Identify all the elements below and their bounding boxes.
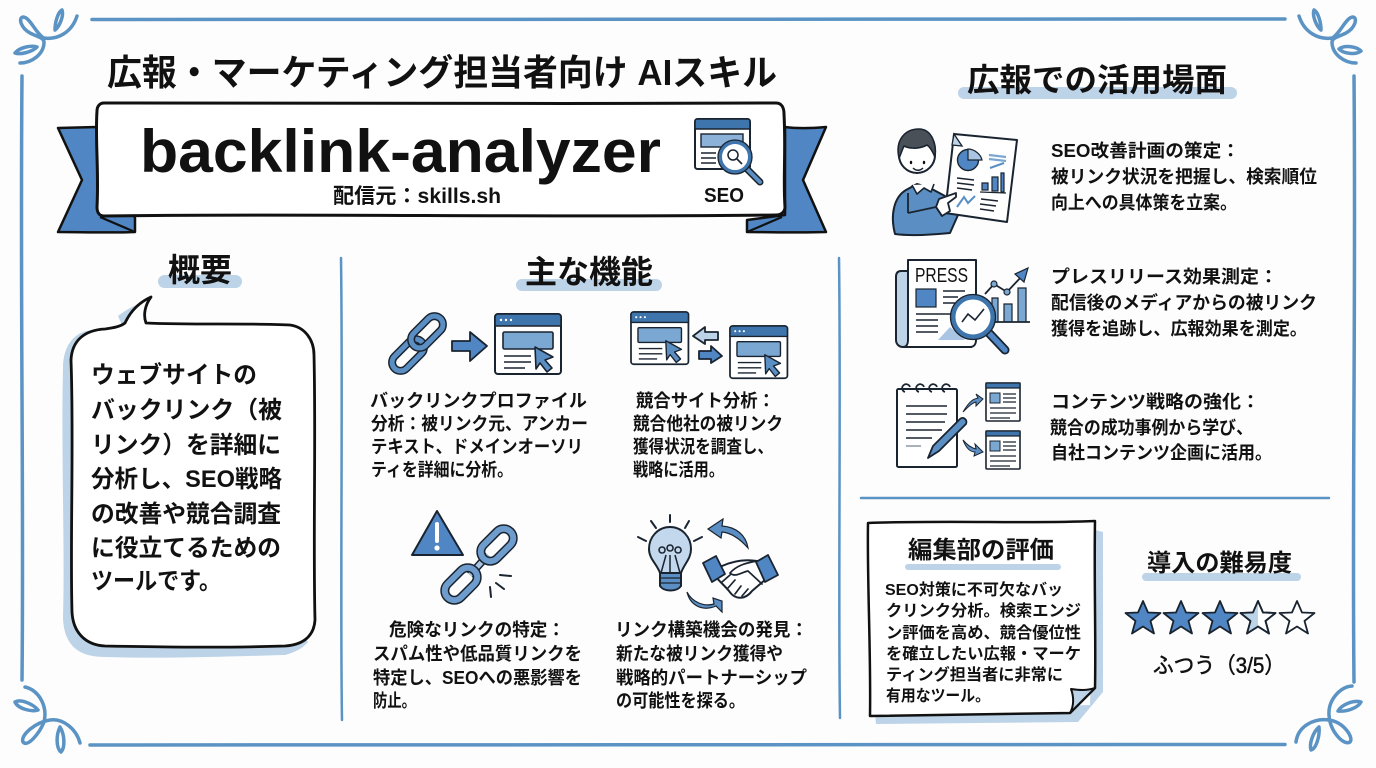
note fold	[1070, 688, 1095, 713]
overview text: の改善や競合調査	[91, 501, 281, 528]
use case text: SEO plan: 被リンク状況を把握し、検索順位	[1051, 167, 1317, 187]
heading: editor review: 編集部の評価	[908, 537, 1054, 564]
SEO label: SEO	[704, 185, 744, 207]
panel: main features	[370, 254, 808, 711]
feature text: competitor analysis: 競合他社の被リンク	[633, 414, 783, 434]
heading: PR use cases: 広報での活用場面	[967, 62, 1227, 98]
icon: person with report	[893, 129, 1017, 235]
speech bubble	[71, 297, 315, 647]
source: 配信元：skills.sh	[333, 185, 501, 208]
use case text: press release: 獲得を追跡し、広報効果を測定。	[1051, 319, 1307, 339]
review text: クリンク分析。検索エンジ	[886, 601, 1081, 620]
difficulty label: ふつう（3/5）	[1153, 653, 1285, 678]
feature text: backlink profile	[370, 391, 588, 480]
icon: competitor browsers	[631, 312, 787, 378]
feature text: risky links: 特定し、SEOへの悪影響を	[373, 667, 582, 688]
review text	[885, 580, 1081, 705]
icon: bulb and handshake	[638, 515, 778, 612]
icon: chain to browser	[389, 313, 561, 374]
review text: ン評価を高め、競合優位性	[886, 623, 1081, 642]
feature text: risky links: 危険なリンクの特定：	[389, 620, 565, 640]
feature text: competitor analysis: 競合サイト分析：	[636, 391, 775, 411]
feature text: link opportunities: 新たな被リンク獲得や	[616, 644, 783, 664]
review text: 有用なツール。	[886, 687, 990, 705]
icon: press release analysis	[896, 260, 1030, 350]
icon: top-right corner flourish	[1299, 10, 1361, 63]
feature text: risky links: スパム性や低品質リンクを	[373, 644, 582, 664]
use case text: SEO plan: 向上への具体策を立案。	[1051, 193, 1237, 213]
banner plate	[96, 102, 785, 216]
star rating	[1126, 601, 1314, 634]
icon: top-left corner flourish	[15, 10, 77, 63]
heading: difficulty: 導入の難易度	[1147, 550, 1292, 577]
icon: SEO browser magnifier	[695, 119, 760, 182]
feature text: competitor analysis: 戦略に活用。	[633, 459, 724, 480]
overview text: ツールです。	[91, 568, 221, 595]
review text: を確立したい広報・マーケ	[886, 644, 1081, 663]
use case text: SEO plan: SEO改善計画の策定：	[1051, 141, 1240, 161]
use case text: content strategy: 競合の成功事例から学び、	[1050, 417, 1253, 438]
section dividers	[341, 258, 1329, 720]
use case text: press release: 配信後のメディアからの被リンク	[1051, 292, 1317, 313]
note sheet	[868, 521, 1095, 716]
panel: editor review note	[868, 521, 1103, 724]
use case text: content strategy	[1050, 391, 1272, 463]
panel: difficulty rating	[1126, 550, 1314, 678]
feature text: risky links: 防止。	[373, 691, 416, 711]
heading: overview: 概要	[168, 252, 232, 288]
feature text: backlink profile: テキスト、ドメインオーソリ	[371, 437, 583, 457]
icon: bottom-right corner flourish	[1296, 686, 1361, 750]
ribbon: left tail	[58, 127, 135, 232]
panel: PR use cases	[893, 62, 1317, 469]
feature text: link opportunities: 戦略的パートナーシップ	[616, 667, 807, 688]
heading: main features: 主な機能	[525, 254, 653, 290]
overview text: リンク）を詳細に	[91, 432, 281, 459]
review text: ティング担当者に非常に	[886, 665, 1063, 684]
icon: warning and broken chain	[412, 511, 517, 604]
feature text: risky links	[373, 620, 582, 711]
use case text: SEO plan	[1051, 141, 1317, 213]
icon: press release analysis: PRESS	[915, 265, 968, 287]
ribbon: right tail	[747, 127, 826, 232]
banner	[58, 102, 826, 232]
overview text: に役立てるための	[91, 535, 281, 562]
overview text: ウェブサイトの	[91, 361, 257, 389]
title: 広報・マーケティング担当者向け AIスキル	[107, 52, 777, 93]
use case text: content strategy: コンテンツ戦略の強化：	[1051, 391, 1260, 412]
feature text: backlink profile: ティを詳細に分析。	[371, 460, 513, 480]
skill name: backlink-analyzer	[140, 118, 661, 185]
icon: notepad and content	[897, 383, 1020, 469]
speech bubble shadow	[62, 303, 308, 658]
use case text: press release: プレスリリース効果測定：	[1051, 267, 1278, 287]
feature text: competitor analysis	[633, 391, 783, 480]
feature text: backlink profile: 分析：被リンク元、アンカー	[371, 414, 588, 434]
feature text: backlink profile: バックリンクプロファイル	[370, 391, 587, 411]
feature text: link opportunities	[615, 619, 808, 711]
overview text: バックリンク（被	[91, 397, 282, 424]
use case text: content strategy: 自社コンテンツ企画に活用。	[1051, 443, 1272, 463]
note shadow	[875, 530, 1103, 724]
feature text: competitor analysis: 獲得状況を調査し、	[633, 437, 773, 457]
review text: SEO対策に不可欠なバッ	[885, 580, 1063, 599]
feature text: link opportunities: リンク構築機会の発見：	[615, 619, 808, 640]
use case text: press release	[1051, 267, 1317, 339]
overview text: 分析し、SEO戦略	[91, 466, 282, 493]
feature text: link opportunities: の可能性を探る。	[616, 691, 745, 711]
overview text	[91, 361, 282, 595]
icon: bottom-left corner flourish	[15, 687, 80, 752]
panel: overview	[62, 252, 315, 658]
